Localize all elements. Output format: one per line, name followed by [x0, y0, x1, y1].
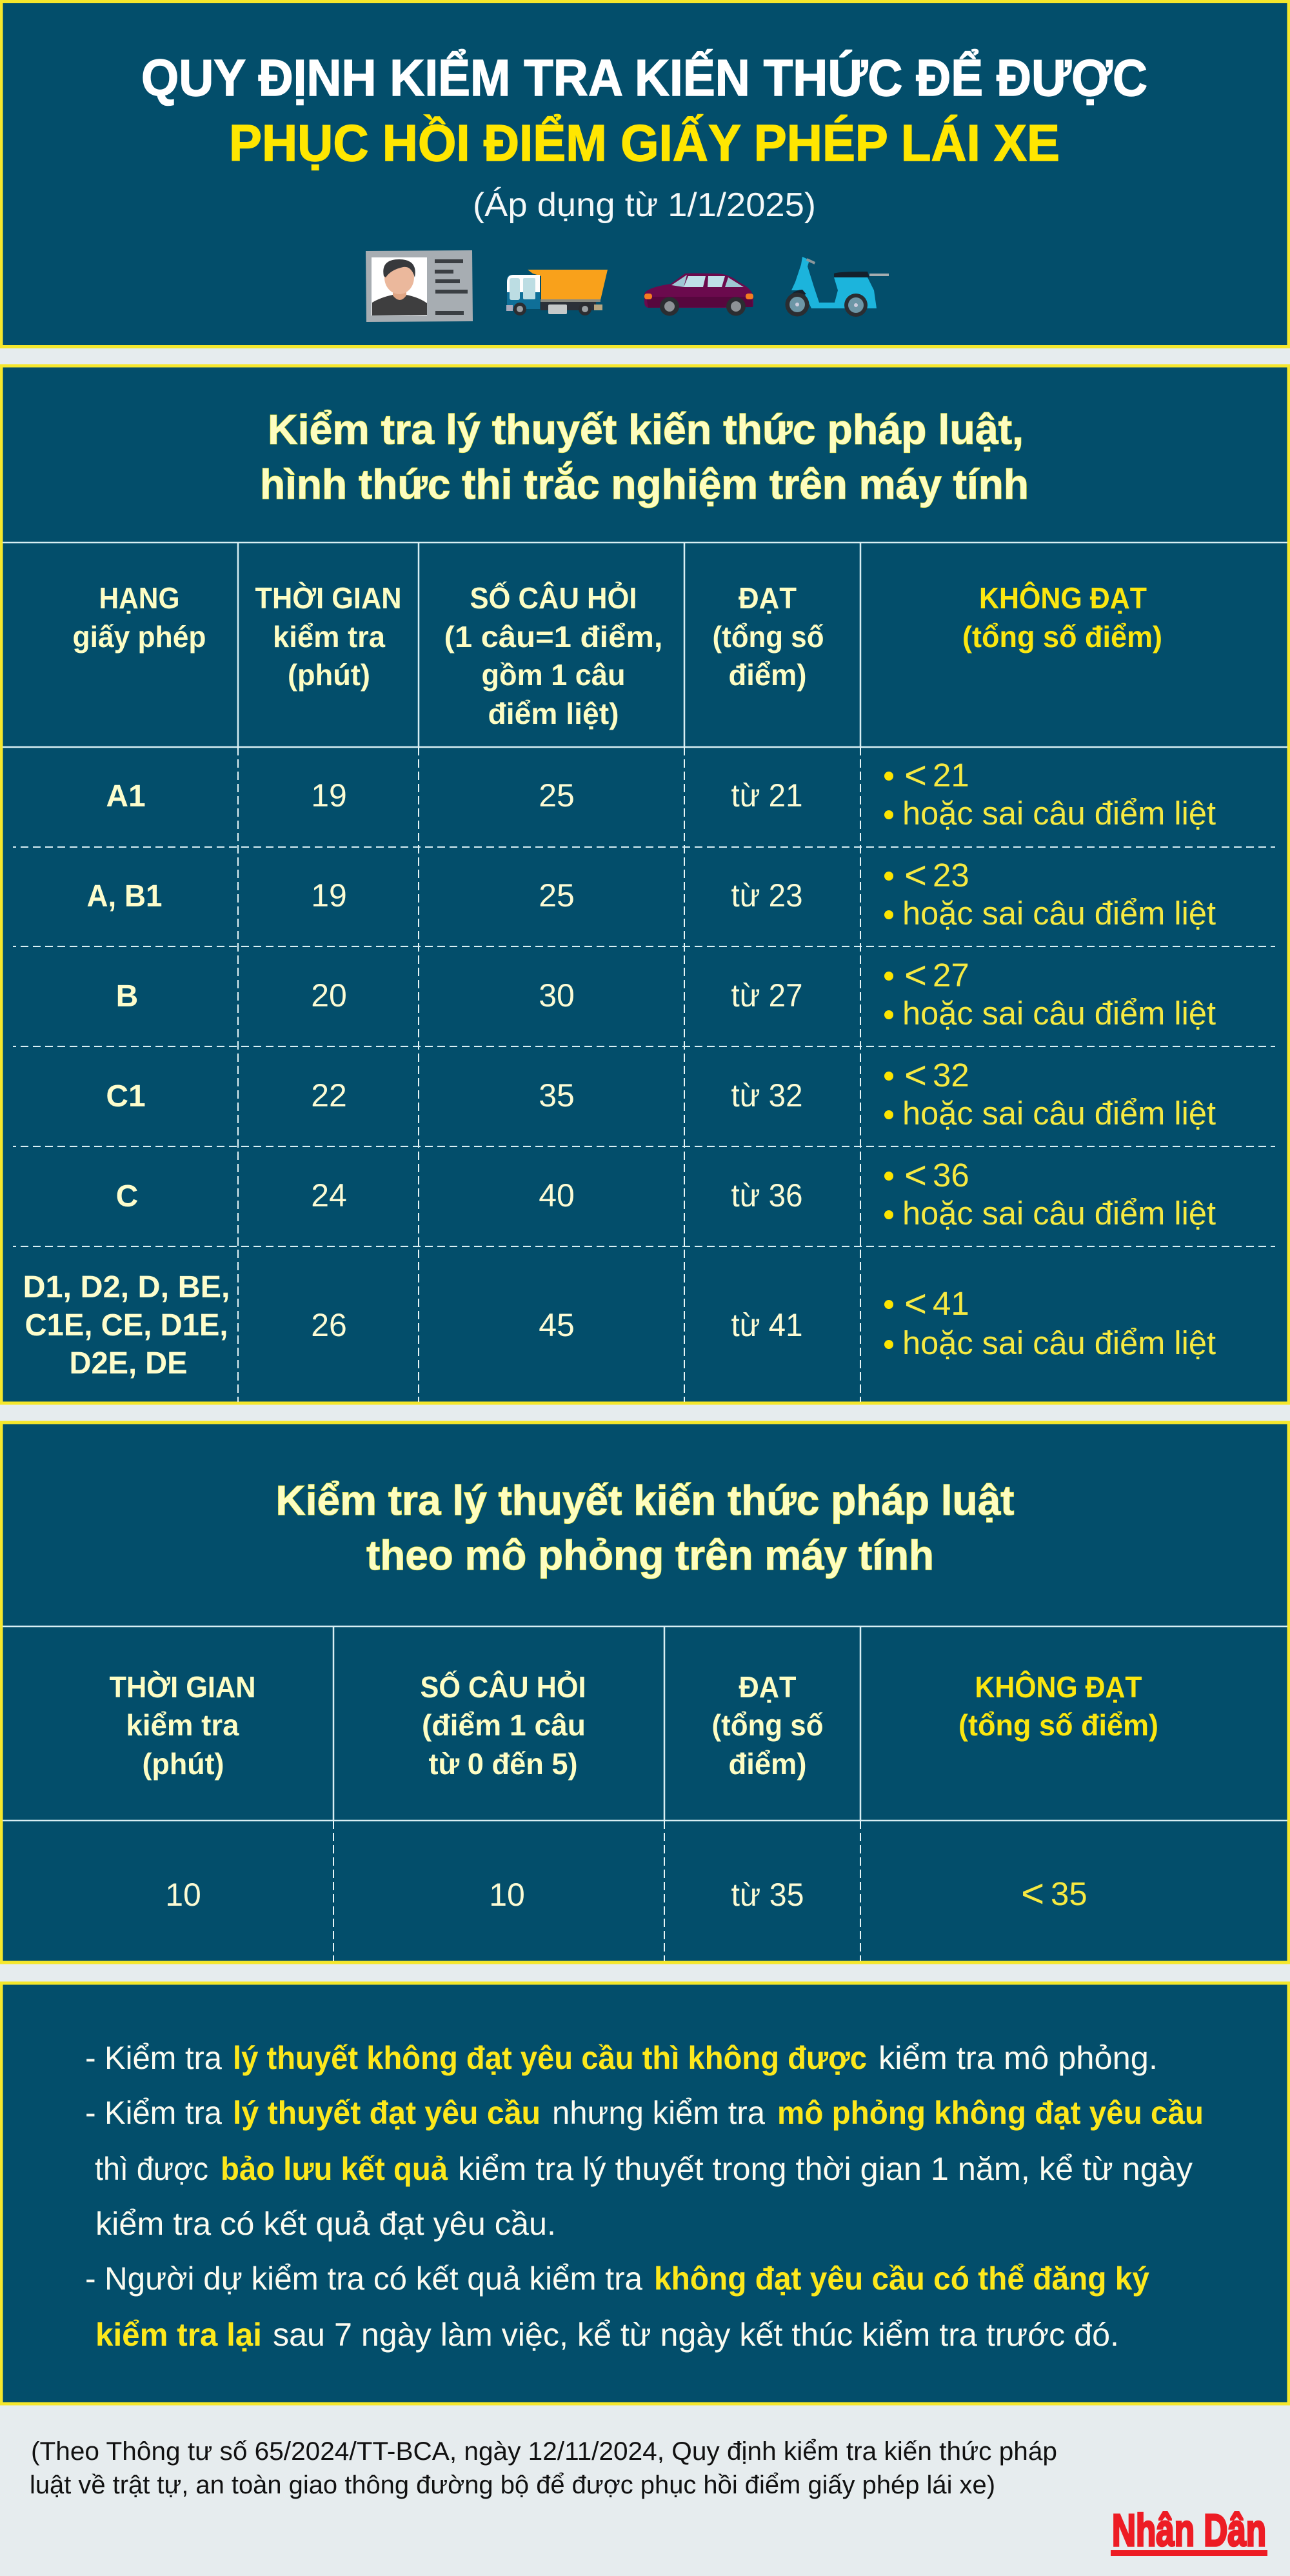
table header: fail: (tổng số điểm) [962, 620, 1162, 654]
data row: 10 [489, 1877, 525, 1913]
table header: question count: điểm liệt) [488, 697, 619, 730]
row D1, D2, D, BE, C1E, CE, D1E, D2E, DE: D1, D2, D, BE, [23, 1270, 230, 1304]
table header: duration: THỜI GIAN [255, 581, 401, 615]
row D1, D2, D, BE, C1E, CE, D1E, D2E, DE [23, 1270, 1216, 1381]
table header: duration: (phút) [142, 1747, 224, 1781]
note 2: Kiểm tra [104, 2095, 222, 2131]
data row [165, 1872, 1087, 1916]
row C [116, 1153, 1216, 1232]
row D1, D2, D, BE, C1E, CE, D1E, D2E, DE: hoặc sai câu điểm liệt [902, 1324, 1216, 1361]
row C1: 22 [311, 1077, 347, 1113]
note 2: mô phỏng không đạt yêu cầu [777, 2095, 1204, 2131]
section heading: theo mô phỏng trên máy tính [366, 1532, 934, 1579]
row B: từ 27 [731, 977, 802, 1013]
table header: question count: gồm 1 câu [481, 658, 626, 692]
row A, B1 [86, 854, 1216, 932]
row C: 36 [933, 1157, 969, 1193]
row A, B1: < [904, 854, 927, 897]
table header: question count [444, 581, 663, 730]
row D1, D2, D, BE, C1E, CE, D1E, D2E, DE: từ 41 [731, 1307, 802, 1343]
row C: 40 [539, 1177, 575, 1213]
table header: duration: kiểm tra [126, 1708, 239, 1742]
table header: duration: (phút) [288, 658, 370, 692]
note 1: Kiểm tra [104, 2040, 222, 2076]
icon: car [644, 274, 753, 316]
table header: pass: (tổng số [712, 1708, 823, 1742]
note 2 [85, 2095, 1204, 2242]
table header: fail [958, 1670, 1158, 1742]
row C1: hoặc sai câu điểm liệt [902, 1095, 1216, 1132]
row B [116, 954, 1216, 1032]
row D1, D2, D, BE, C1E, CE, D1E, D2E, DE: D2E, DE [70, 1346, 187, 1381]
note 1: - [85, 2040, 96, 2076]
table header: duration: kiểm tra [273, 620, 385, 654]
row A, B1: 19 [311, 877, 347, 914]
row D1, D2, D, BE, C1E, CE, D1E, D2E, DE: C1E, CE, D1E, [25, 1308, 228, 1343]
note 2: lý thuyết đạt yêu cầu [233, 2095, 541, 2131]
row C1: từ 32 [731, 1077, 802, 1113]
table header: licence class: HẠNG [99, 581, 179, 615]
note 3: kiểm tra lại [95, 2317, 262, 2353]
row A1: từ 21 [731, 777, 802, 814]
table header: question count: từ 0 đến 5) [428, 1747, 578, 1781]
row B: 30 [539, 977, 575, 1013]
note 3 [85, 2261, 1149, 2353]
data row: 35 [1051, 1875, 1087, 1912]
table header: pass: điểm) [729, 1747, 806, 1781]
row A1: 21 [933, 757, 969, 794]
table header: pass: ĐẠT [739, 1670, 796, 1704]
data row: từ 35 [731, 1877, 804, 1913]
table header: fail: KHÔNG ĐẠT [975, 1670, 1142, 1704]
row D1, D2, D, BE, C1E, CE, D1E, D2E, DE: 26 [311, 1307, 347, 1343]
note 2: kiểm tra lý thuyết trong thời gian 1 năm, kể từ ngày [458, 2151, 1193, 2187]
row A, B1: từ 23 [731, 877, 802, 914]
table header: question count: (1 câu=1 điểm, [444, 620, 663, 654]
note 2: - [85, 2095, 96, 2131]
row A1: A1 [106, 779, 146, 814]
note 3: không đạt yêu cầu có thể đăng ký [654, 2261, 1149, 2297]
row C: C [116, 1179, 138, 1213]
row C: < [904, 1153, 927, 1197]
table header: fail [962, 581, 1162, 654]
row B: hoặc sai câu điểm liệt [902, 995, 1216, 1032]
note 3: Người dự kiểm tra có kết quả kiểm tra [104, 2261, 642, 2297]
row A1 [106, 754, 1216, 832]
row D1, D2, D, BE, C1E, CE, D1E, D2E, DE: 45 [539, 1307, 575, 1343]
data row: < [1021, 1872, 1044, 1916]
title line 1: QUY ĐỊNH KIỂM TRA KIẾN THỨC ĐỂ ĐƯỢC [141, 49, 1147, 106]
row B: 20 [311, 977, 347, 1013]
note 3: sau 7 ngày làm việc, kể từ ngày kết thúc kiểm tra trước đó. [273, 2317, 1119, 2353]
table header: question count [421, 1670, 586, 1781]
row A, B1: A, B1 [86, 879, 163, 914]
subtitle: (Áp dụng từ 1/1/2025) [473, 186, 816, 224]
section heading: hình thức thi trắc nghiệm trên máy tính [260, 461, 1029, 508]
row C1: 32 [933, 1057, 969, 1093]
note 2: thì được [95, 2151, 208, 2187]
row B: B [116, 979, 138, 1013]
icon: licence card [366, 250, 473, 322]
table header: question count: (điểm 1 câu [422, 1708, 586, 1742]
row C1: < [904, 1053, 927, 1097]
panel: multiple-choice test table [1, 366, 1289, 1403]
row A, B1: 25 [539, 877, 575, 914]
row A1: < [904, 754, 927, 797]
row C: 24 [311, 1177, 347, 1213]
row B: < [904, 954, 927, 997]
row A1: 25 [539, 777, 575, 814]
table header: duration [110, 1670, 255, 1781]
row A1: hoặc sai câu điểm liệt [902, 795, 1216, 832]
title line 2: PHỤC HỒI ĐIỂM GIẤY PHÉP LÁI XE [229, 114, 1060, 172]
table header: fail: (tổng số điểm) [958, 1708, 1158, 1742]
row A, B1: hoặc sai câu điểm liệt [902, 895, 1216, 932]
table header: pass [712, 1670, 823, 1781]
note 1: lý thuyết không đạt yêu cầu thì không được [233, 2040, 867, 2076]
source citation: luật về trật tự, an toàn giao thông đường bộ để được phục hồi điểm giấy phép lái xe) [30, 2471, 995, 2499]
table header: licence class [72, 581, 206, 654]
note 2: kiểm tra có kết quả đạt yêu cầu. [95, 2206, 556, 2242]
table header: fail: KHÔNG ĐẠT [979, 581, 1147, 615]
table header: pass [712, 581, 824, 692]
section heading [260, 406, 1029, 508]
source citation [30, 2437, 1057, 2499]
section heading: Kiểm tra lý thuyết kiến thức pháp luật, [268, 406, 1024, 453]
row C: từ 36 [731, 1177, 802, 1213]
section heading [276, 1477, 1014, 1579]
panel: notes [1, 1983, 1289, 2404]
note 1: kiểm tra mô phỏng. [878, 2040, 1158, 2076]
table header: duration [255, 581, 401, 692]
panel: simulation test table [1, 1423, 1289, 1962]
row C: hoặc sai câu điểm liệt [902, 1195, 1216, 1232]
table header: question count: SỐ CÂU HỎI [470, 581, 637, 615]
source citation: (Theo Thông tư số 65/2024/TT-BCA, ngày 12/11/2024, Quy định kiểm tra kiến thức pháp [31, 2437, 1057, 2466]
row D1, D2, D, BE, C1E, CE, D1E, D2E, DE: 41 [933, 1285, 969, 1322]
table header: pass: ĐẠT [739, 581, 797, 615]
section heading: Kiểm tra lý thuyết kiến thức pháp luật [276, 1477, 1014, 1524]
table header: pass: điểm) [729, 658, 806, 692]
table header: pass: (tổng số [712, 620, 824, 654]
data row: 10 [165, 1877, 201, 1913]
panel: header [1, 1, 1289, 347]
row A1: 19 [311, 777, 347, 814]
note 2: bảo lưu kết quả [221, 2151, 448, 2187]
table header: duration: THỜI GIAN [110, 1670, 255, 1704]
row C1: 35 [539, 1077, 575, 1113]
row A, B1: 23 [933, 857, 969, 894]
icon: scooter [786, 257, 889, 317]
icon: truck [506, 270, 608, 315]
table header: licence class: giấy phép [72, 620, 206, 654]
table header: question count: SỐ CÂU HỎI [421, 1670, 586, 1704]
note 2: nhưng kiểm tra [552, 2095, 765, 2131]
row C1: C1 [106, 1079, 146, 1113]
row B: 27 [933, 957, 969, 993]
row D1, D2, D, BE, C1E, CE, D1E, D2E, DE: < [904, 1282, 927, 1325]
row C1 [106, 1053, 1216, 1132]
note 1 [85, 2040, 1158, 2076]
note 3: - [85, 2261, 96, 2297]
